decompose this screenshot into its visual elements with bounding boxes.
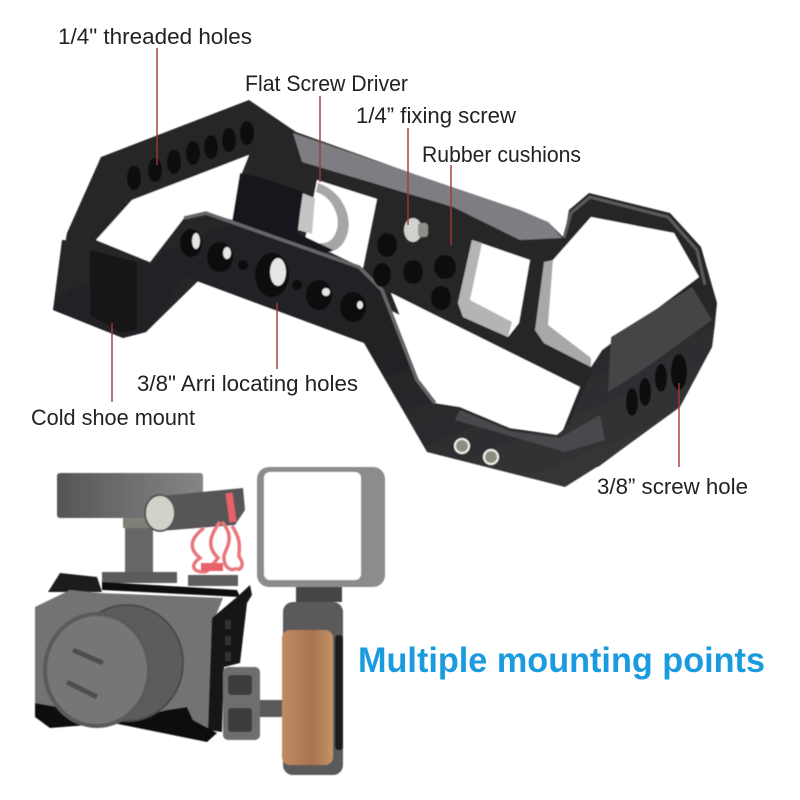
- post collar: [123, 518, 155, 528]
- red shock mount: [192, 522, 242, 572]
- shock mount strap: [229, 493, 233, 522]
- leader lines: [112, 48, 679, 467]
- plate window inner edge: [458, 240, 512, 337]
- mic end cap: [145, 495, 175, 531]
- light mount: [296, 587, 342, 602]
- label: threaded holes: 1/4" threaded holes: [58, 24, 252, 49]
- side clamp: [223, 667, 260, 740]
- cold shoe slot: [90, 250, 137, 332]
- cage right holes: [225, 620, 231, 661]
- cage right side: [208, 585, 252, 732]
- grip body: [283, 602, 343, 775]
- grip side slot: [335, 635, 343, 750]
- D-ring opening: [305, 180, 377, 268]
- front screws: [455, 439, 498, 464]
- rail holes: [180, 229, 366, 322]
- shoe pink top: [201, 563, 223, 571]
- plate top light facet: [293, 133, 562, 240]
- rail hole highlights: [192, 233, 363, 309]
- lens barrel: [71, 605, 183, 721]
- front section facet: [455, 410, 605, 452]
- back mount block: [232, 173, 333, 256]
- label: Arri holes: 3/8" Arri locating holes: [137, 371, 358, 396]
- heading: multiple mounting points: Multiple mounting points: [358, 641, 765, 680]
- plate window: [458, 240, 530, 337]
- post base: [102, 572, 177, 583]
- label: fixing screw: 1/4” fixing screw: [356, 103, 516, 128]
- cage top left: [48, 573, 102, 592]
- clamp knobs: [228, 675, 252, 732]
- right rail holes: [626, 354, 687, 416]
- arch highlight: [564, 197, 705, 285]
- label: rubber cushions: Rubber cushions: [422, 142, 581, 167]
- gap under plate: [391, 293, 580, 432]
- top arm holes: [127, 121, 254, 190]
- right section facet: [608, 287, 712, 392]
- cage back frame: [53, 100, 717, 467]
- cage bottom right: [113, 707, 217, 742]
- grip opening inner edge: [535, 260, 591, 367]
- label: cold shoe: Cold shoe mount: [31, 405, 195, 430]
- clamp arm: [260, 700, 284, 717]
- LED light frame: [257, 467, 385, 587]
- rail top highlight: [184, 213, 435, 403]
- cage top bar: [102, 582, 240, 597]
- camera body: [35, 590, 223, 737]
- plate holes: [373, 233, 456, 310]
- top arm opening: [96, 155, 249, 262]
- product photo: camera cage: [53, 100, 717, 487]
- fixing screw thread: [418, 223, 428, 237]
- D-ring tab: [298, 193, 315, 234]
- shoe: [188, 575, 238, 586]
- product photo: camera rig: [35, 467, 385, 775]
- D-ring: [310, 183, 349, 253]
- label: screw hole: 3/8” screw hole: [597, 474, 748, 499]
- grip wood: [282, 630, 333, 765]
- handle post: [125, 527, 153, 573]
- cap pinch marks: [67, 650, 103, 697]
- label: screw driver: Flat Screw Driver: [245, 71, 408, 96]
- lens cap: [45, 614, 149, 726]
- microphone: [150, 488, 245, 531]
- grip opening: [535, 217, 699, 367]
- LED light panel: [264, 472, 361, 580]
- fixing screw: [404, 218, 422, 242]
- top handle: [57, 473, 203, 518]
- cage bottom left: [35, 703, 88, 728]
- front rail: [53, 213, 715, 487]
